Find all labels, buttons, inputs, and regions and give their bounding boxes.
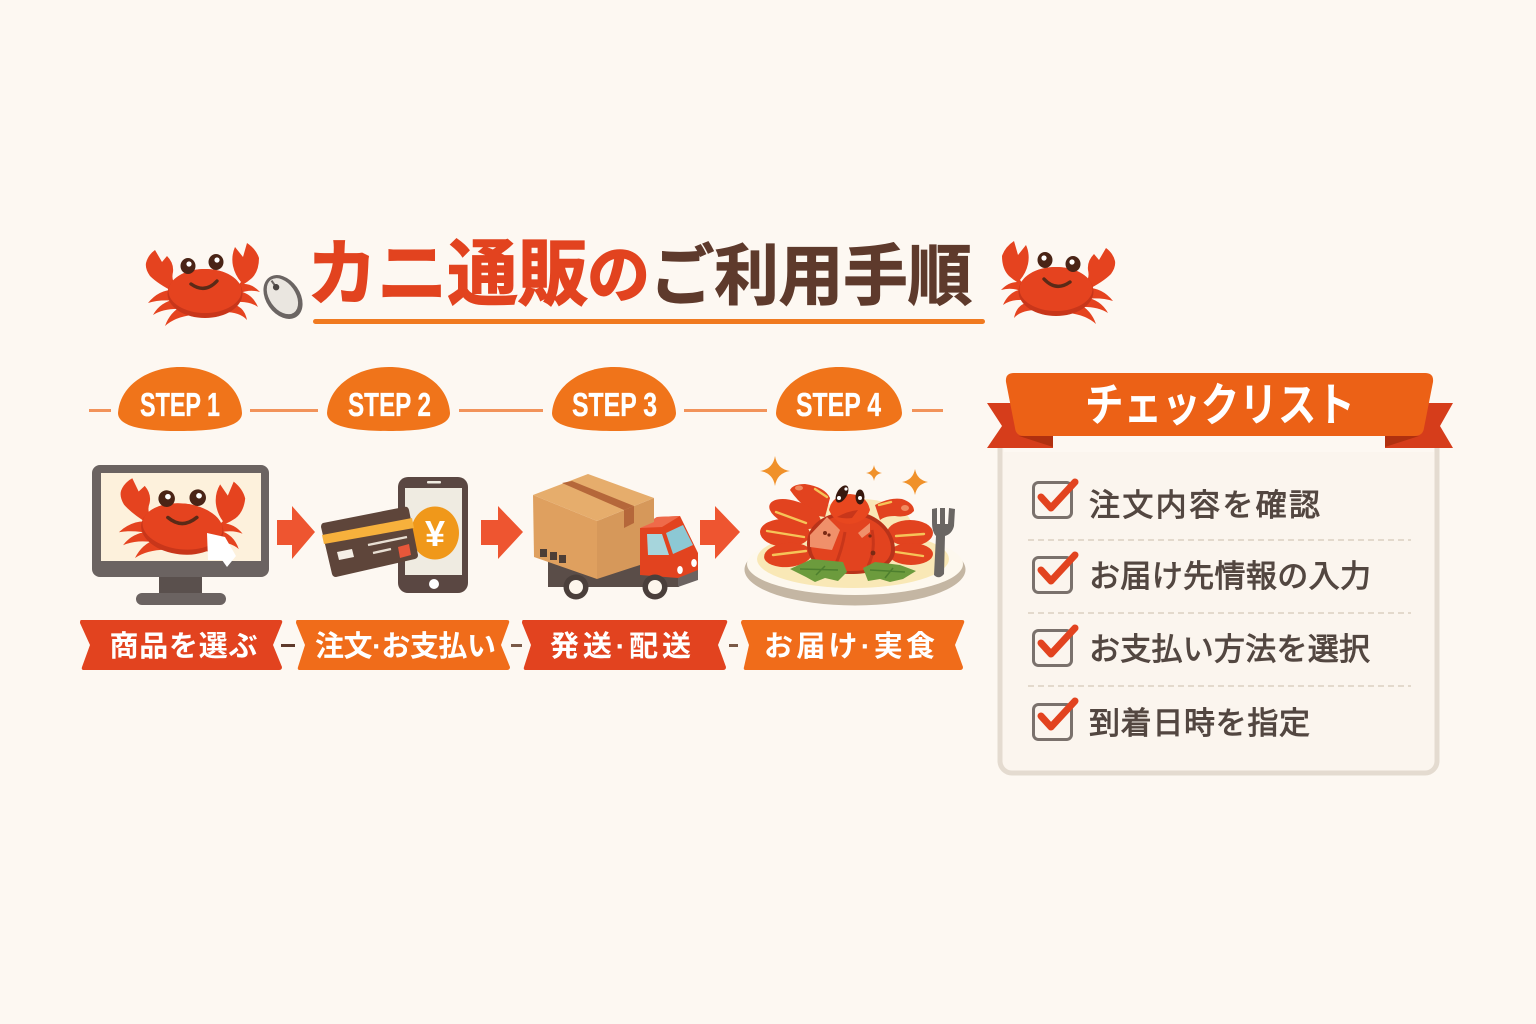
label ribbon 4 — [741, 620, 964, 670]
banner band gap — [1004, 436, 1434, 452]
dash 2 — [511, 644, 522, 647]
step 1 badge — [118, 367, 242, 431]
step 4 badge — [776, 367, 902, 431]
label ribbon 1 — [80, 620, 282, 670]
icon: right title crab — [1001, 241, 1115, 324]
title: カニ通販 — [307, 235, 588, 315]
arrow 2 — [481, 506, 523, 559]
item 3: お支払い方法を選択 — [1089, 632, 1370, 667]
arrow 1 — [277, 506, 315, 559]
icon: credit card and smartphone — [321, 477, 468, 593]
title — [307, 235, 972, 315]
dashed dividers — [1028, 540, 1411, 686]
title underline — [313, 319, 985, 324]
title: の — [587, 241, 650, 311]
checklist banner: チェックリスト — [1085, 379, 1355, 431]
item 1 — [1034, 482, 1320, 523]
label ribbon 1: 商品を選ぶ — [110, 630, 258, 663]
step 3 badge: STEP 3 — [572, 386, 657, 423]
label ribbon 3 — [522, 620, 727, 670]
icon: left title crab — [146, 243, 260, 326]
label ribbon 2: 注文·お支払い — [315, 630, 496, 663]
step 4 badge: STEP 4 — [796, 386, 881, 423]
checklist banner — [987, 373, 1453, 448]
step connector lines — [89, 409, 943, 412]
arrow 3 — [700, 506, 740, 559]
label ribbon 2 — [296, 620, 510, 670]
checklist card — [1000, 430, 1437, 773]
step 2 badge — [327, 367, 450, 431]
title: ご利用手順 — [650, 239, 972, 313]
icon: computer mouse — [255, 268, 311, 326]
icon: plated crab dish — [744, 456, 966, 606]
dash 3 — [729, 644, 738, 647]
item 1: 注文内容を確認 — [1089, 488, 1320, 523]
step 2 badge: STEP 2 — [348, 386, 431, 423]
dash 1 — [281, 644, 295, 647]
icon: delivery truck with box — [533, 474, 698, 600]
label ribbon 3: 発送·配送 — [550, 630, 691, 663]
icon: monitor with crab — [92, 465, 269, 605]
item 4: 到着日時を指定 — [1089, 706, 1310, 741]
item 4 — [1034, 701, 1310, 741]
step 3 badge — [552, 367, 676, 431]
icon: credit card and smartphone: ¥ — [425, 513, 445, 554]
panel: checklist — [987, 373, 1453, 773]
label ribbon 4: お届け·実食 — [764, 630, 935, 663]
step 1 badge: STEP 1 — [140, 386, 220, 423]
item 2: お届け先情報の入力 — [1089, 559, 1371, 594]
